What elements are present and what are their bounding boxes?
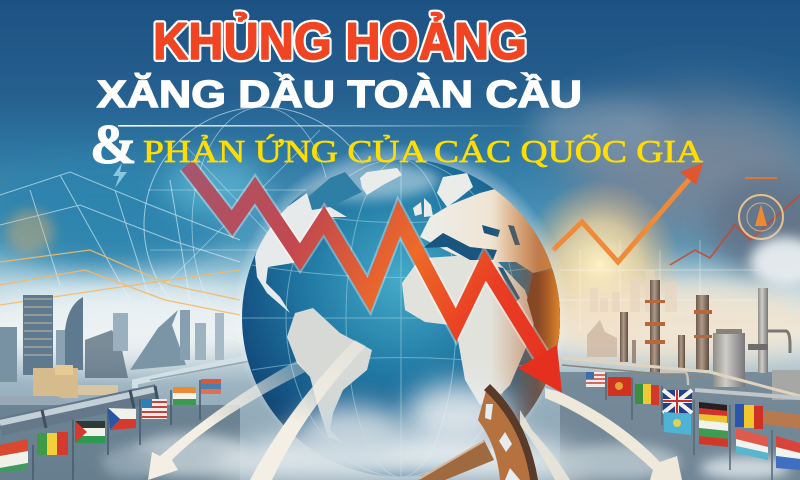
left back clouds [102, 433, 250, 478]
seas: Mediterranean, Black and Caspian [423, 225, 520, 303]
clouds [215, 383, 790, 480]
globe grid [242, 159, 526, 477]
icon: gauge target [739, 178, 783, 239]
title line 1: KHỦNG HOẢNG [153, 12, 527, 71]
flag: Montenegro [608, 377, 631, 396]
white arrow: left inner [250, 340, 366, 480]
left wireframe globe and energy network [0, 107, 380, 343]
flag: India [173, 387, 196, 405]
continent: Greenland [360, 168, 402, 195]
left city skyline [0, 295, 224, 398]
title block [90, 12, 703, 176]
flag: United States [142, 399, 167, 419]
flag: Palestine [75, 421, 105, 443]
right oil refinery [587, 237, 800, 400]
ampersand: & [90, 114, 137, 176]
flag: Senegal [635, 384, 659, 405]
left flags [0, 379, 221, 480]
flag: striped [201, 379, 221, 394]
falling red arrow [187, 165, 562, 393]
flag: United Kingdom [663, 390, 692, 413]
right chart backdrop and rising arrow [553, 163, 800, 330]
continent: Scandinavia and Britain [413, 173, 473, 217]
continent: Eurasia [420, 185, 557, 273]
continent: Canada islands [308, 172, 362, 212]
flag: Kazakhstan [664, 412, 691, 435]
divider line [118, 125, 538, 127]
left pipeline [0, 357, 250, 428]
title line 3: PHẢN ỨNG CỦA CÁC QUỐC GIA [143, 133, 703, 169]
Indian Ocean shading [527, 270, 560, 345]
haze at top of globe [260, 160, 440, 200]
title line 1 outline: KHỦNG HOẢNG [153, 12, 527, 71]
continent: North America [255, 193, 347, 313]
icon: lightning bolt [113, 163, 127, 188]
flag: Czechia [108, 408, 136, 430]
flag: Romania [735, 404, 763, 429]
flag: Germany style [699, 402, 727, 423]
continent: South America [287, 308, 372, 443]
white arrow: left outer [148, 360, 305, 480]
continent: Africa [402, 255, 535, 405]
title line 2: XĂNG DẦU TOÀN CẦU [97, 72, 582, 116]
right flags [586, 372, 800, 480]
right pipeline [562, 358, 800, 422]
flag: United States [586, 372, 605, 387]
flag: red white green [0, 439, 28, 472]
flag: Luxembourg [736, 428, 768, 460]
flag: Bulgaria [699, 420, 728, 447]
white arrow: right outer [545, 388, 682, 480]
white arrow: right inner [520, 410, 570, 480]
pumpjack [418, 384, 538, 480]
flag: Netherlands [776, 436, 800, 470]
globe [233, 143, 569, 479]
flag: Mali [37, 432, 68, 455]
